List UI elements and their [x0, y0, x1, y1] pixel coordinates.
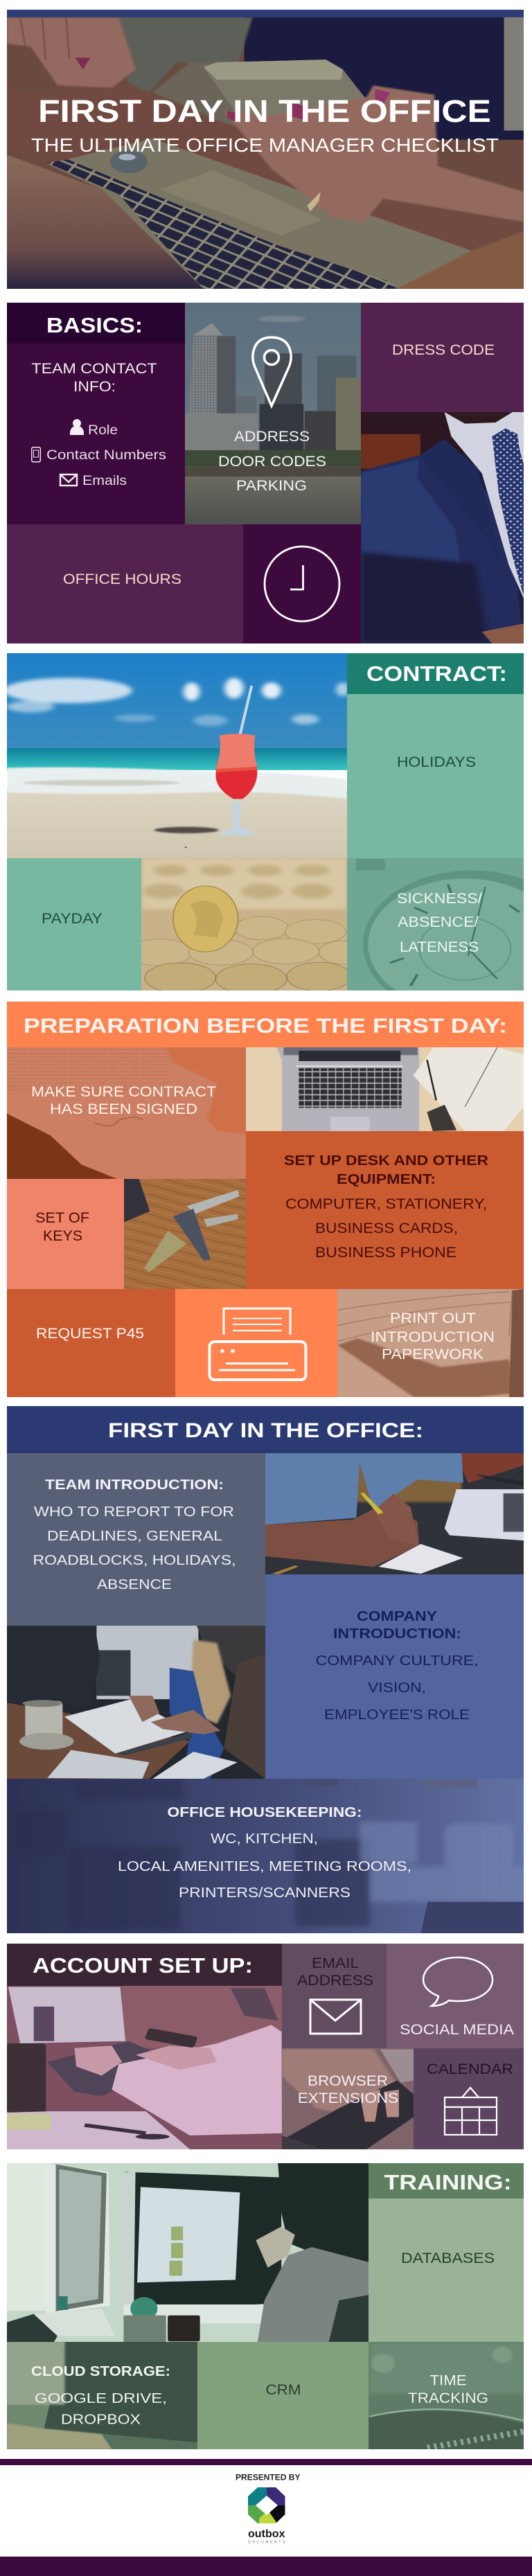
company introduction block — [265, 1574, 524, 1779]
request P45 block: REQUEST P45 — [36, 1326, 144, 1342]
team introduction block — [7, 1453, 265, 1626]
set up desk block — [246, 1131, 524, 1289]
photo: person typing on laptop — [7, 1986, 282, 2149]
team introduction block: WHO TO REPORT TO FOR — [34, 1504, 234, 1520]
cloud storage block: GOOGLE DRIVE, — [35, 2391, 167, 2406]
cloud storage block: DROPBOX — [61, 2412, 141, 2427]
set of keys block: SET OF — [35, 1210, 89, 1226]
dress code block — [361, 303, 524, 412]
photo: laptop and notebook on desk — [246, 1047, 524, 1131]
CRM block: CRM — [266, 2382, 301, 2398]
icon: calendar — [445, 2088, 497, 2135]
panel: contract — [3, 653, 532, 1018]
photo: coins — [141, 858, 347, 991]
address list: DOOR CODES — [218, 454, 326, 470]
icon: outbox logo — [248, 2487, 285, 2523]
cloud storage block: CLOUD STORAGE: — [31, 2364, 170, 2379]
browser extensions block: EXTENSIONS — [298, 2090, 398, 2106]
office hours block: OFFICE HOURS — [63, 571, 181, 587]
office hours block — [7, 524, 243, 643]
social media block: SOCIAL MEDIA — [400, 2022, 514, 2038]
documents wordmark: DOCUMENTS — [248, 2541, 285, 2545]
contract heading: CONTRACT: — [366, 661, 507, 686]
icon: envelope — [310, 2000, 361, 2034]
team contact info block: Role — [88, 423, 118, 438]
basics heading: BASICS: — [46, 313, 143, 337]
training heading — [369, 2163, 524, 2199]
email address block: ADDRESS — [297, 1973, 373, 1989]
photo: suit and tie — [361, 412, 524, 643]
panel: preparation before the first day — [7, 1002, 524, 1397]
team contact info block — [7, 344, 185, 524]
dress code block: DRESS CODE — [392, 342, 495, 358]
footer top bar — [0, 2459, 532, 2465]
print out paperwork block — [337, 1289, 524, 1397]
team introduction block: ROADBLOCKS, HOLIDAYS, — [33, 1553, 236, 1568]
photo: man writing — [265, 1453, 524, 1574]
photo: woman at desktop monitors — [7, 2163, 369, 2342]
set up desk block: BUSINESS PHONE — [315, 1245, 456, 1261]
request P45 block — [7, 1289, 175, 1397]
panel: first day in the office — [7, 1406, 524, 1933]
office housekeeping block: OFFICE HOUSEKEEPING: — [168, 1805, 362, 1820]
team contact info block: INFO: — [73, 379, 116, 395]
holidays block — [347, 694, 524, 858]
team introduction block: ABSENCE — [97, 1577, 172, 1592]
databases block: DATABASES — [401, 2250, 495, 2266]
browser extensions block — [282, 2048, 414, 2149]
first day heading — [7, 1406, 524, 1453]
set up desk block: BUSINESS CARDS, — [315, 1220, 458, 1236]
address block with city photo — [185, 303, 361, 524]
company introduction block: INTRODUCTION: — [333, 1626, 461, 1642]
email address block: EMAIL — [312, 1955, 359, 1971]
company introduction block: VISION, — [368, 1680, 426, 1696]
set of keys block — [7, 1179, 124, 1289]
icon: person — [70, 419, 84, 435]
hero top bar — [7, 10, 524, 17]
cloud storage block — [7, 2342, 197, 2449]
panel: account set up — [7, 1944, 524, 2149]
panel: training — [7, 2163, 524, 2449]
payday block: PAYDAY — [42, 911, 103, 927]
footer bottom bar — [0, 2557, 532, 2576]
icon: phone — [32, 447, 40, 462]
team introduction block: DEADLINES, GENERAL — [47, 1529, 222, 1544]
contract signing block: HAS BEEN SIGNED — [50, 1101, 197, 1117]
set up desk block: SET UP DESK AND OTHER — [284, 1153, 489, 1169]
account heading: ACCOUNT SET UP: — [33, 1953, 253, 1978]
footer — [0, 2459, 532, 2576]
outbox wordmark: outbox — [248, 2528, 285, 2540]
contract signing block — [7, 1047, 246, 1179]
holidays block: HOLIDAYS — [397, 754, 476, 770]
preparation heading — [7, 1002, 524, 1047]
team contact info block: Contact Numbers — [46, 448, 166, 463]
set up desk block: EQUIPMENT: — [337, 1172, 436, 1187]
time tracking block: TRACKING — [408, 2390, 488, 2406]
team contact info block: TEAM CONTACT — [32, 361, 157, 377]
time tracking block — [369, 2342, 524, 2449]
address list: PARKING — [236, 478, 307, 494]
icon: location pin — [253, 337, 291, 406]
photo: beach cocktail — [7, 653, 347, 858]
calendar block: CALENDAR — [427, 2061, 513, 2077]
icon: clock — [243, 524, 361, 643]
browser extensions block: BROWSER — [308, 2073, 388, 2089]
email address block — [282, 1944, 387, 2048]
basics heading — [7, 303, 185, 344]
hero subtitle: THE ULTIMATE OFFICE MANAGER CHECKLIST — [31, 134, 499, 156]
contract signing block: MAKE SURE CONTRACT — [31, 1084, 216, 1100]
social media block — [387, 1944, 524, 2048]
office housekeeping block — [7, 1779, 524, 1933]
sickness absence lateness block with clock photo — [347, 858, 532, 1018]
payday block — [7, 858, 141, 991]
CRM block — [197, 2342, 369, 2449]
print out paperwork block: PRINT OUT — [390, 1311, 476, 1326]
preparation heading: PREPARATION BEFORE THE FIRST DAY: — [24, 1015, 507, 1038]
icon: mail — [60, 474, 77, 486]
hero title: FIRST DAY IN THE OFFICE — [38, 94, 491, 129]
print out paperwork block: INTRODUCTION — [371, 1329, 495, 1345]
company introduction block: EMPLOYEE'S ROLE — [324, 1707, 470, 1723]
team introduction block: TEAM INTRODUCTION: — [45, 1477, 224, 1493]
icon: printer — [175, 1289, 337, 1397]
office housekeeping block: LOCAL AMENITIES, MEETING ROOMS, — [118, 1859, 411, 1874]
set of keys block: KEYS — [43, 1228, 82, 1244]
panel: basics — [7, 303, 524, 643]
sickness absence lateness block with clock photo: SICKNESS/ — [397, 891, 482, 907]
office housekeeping block: WC, KITCHEN, — [211, 1831, 318, 1847]
photo: woman writing in notebook with coffee — [7, 1626, 265, 1779]
calendar block — [414, 2048, 524, 2149]
account heading — [7, 1944, 282, 1986]
contract heading — [347, 653, 524, 694]
address list: ADDRESS — [234, 429, 310, 445]
company introduction block: COMPANY CULTURE, — [316, 1653, 478, 1669]
presented by label: PRESENTED BY — [236, 2474, 301, 2482]
hero photo: hands with phone over laptop — [7, 17, 524, 289]
sickness absence lateness block with clock photo: ABSENCE/ — [398, 914, 479, 930]
company introduction block: COMPANY — [357, 1609, 438, 1624]
training heading: TRAINING: — [384, 2170, 511, 2194]
team contact info block: Emails — [82, 474, 127, 488]
address list — [218, 429, 326, 494]
first day heading: FIRST DAY IN THE OFFICE: — [108, 1419, 423, 1442]
set up desk block: COMPUTER, STATIONERY, — [285, 1196, 487, 1212]
print out paperwork block: PAPERWORK — [382, 1347, 484, 1362]
databases block — [369, 2199, 524, 2342]
icon: speech bubble — [423, 1957, 493, 2006]
photo: keys on wood — [124, 1179, 246, 1289]
hero banner — [7, 10, 524, 289]
sickness absence lateness block with clock photo: LATENESS — [400, 939, 479, 955]
office housekeeping block: PRINTERS/SCANNERS — [179, 1885, 351, 1901]
time tracking block: TIME — [429, 2373, 467, 2388]
